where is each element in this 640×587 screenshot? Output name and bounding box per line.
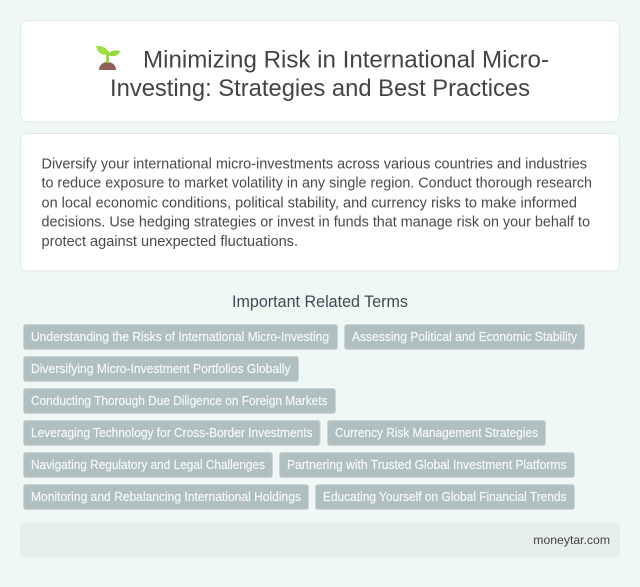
text block: description <box>42 156 592 250</box>
tag: understanding the risks <box>24 324 338 350</box>
text block: description: on local economic conditions, political stability, and currency risks to make informed <box>42 195 577 211</box>
text block: description: Diversify your international micro-investments across various countries and industries <box>42 156 587 172</box>
tag: trusted platforms <box>280 452 574 478</box>
icon: seedling <box>96 46 120 70</box>
tag: currency risk <box>328 420 546 446</box>
tag: due diligence <box>24 388 336 414</box>
tag: regulatory challenges: Navigating Regulatory and Legal Challenges <box>31 458 265 472</box>
tag: understanding the risks: Understanding the Risks of International Micro-Investing <box>31 330 329 344</box>
tag: diversifying portfolios <box>24 356 298 382</box>
tag: monitoring holdings <box>24 484 308 510</box>
text block: description: decisions. Use hedging strategies or invest in funds that manage risk on your behalf to <box>42 214 590 230</box>
tag: leveraging technology: Leveraging Technology for Cross-Border Investments <box>31 426 312 440</box>
tag: diversifying portfolios: Diversifying Micro-Investment Portfolios Globally <box>31 362 291 376</box>
footer <box>20 523 620 557</box>
text block: description: protect against unexpected fluctuations. <box>42 234 298 250</box>
tag: currency risk: Currency Risk Management Strategies <box>335 426 538 440</box>
text block: description: to reduce exposure to market volatility in any single region. Conduct thorough research <box>42 176 592 192</box>
panel: header <box>20 20 620 122</box>
tag: assessing stability: Assessing Political and Economic Stability <box>352 330 578 344</box>
title: Minimizing Risk in International Micro- <box>143 46 549 74</box>
tag: monitoring holdings: Monitoring and Rebalancing International Holdings <box>31 490 301 504</box>
heading: important related terms: Important Related Terms <box>232 293 408 311</box>
tag list <box>24 324 584 510</box>
tag: global trends <box>316 484 574 510</box>
panel: description <box>20 134 620 271</box>
tag: regulatory challenges <box>24 452 272 478</box>
tag: due diligence: Conducting Thorough Due Diligence on Foreign Markets <box>31 394 328 408</box>
tag: global trends: Educating Yourself on Global Financial Trends <box>323 490 566 504</box>
tag: trusted platforms: Partnering with Trusted Global Investment Platforms <box>287 458 566 472</box>
tag: assessing stability <box>344 324 584 350</box>
title: Investing: Strategies and Best Practices <box>110 75 530 102</box>
tag: leveraging technology <box>24 420 320 446</box>
title <box>110 46 549 102</box>
footer source text: moneytar.com <box>533 533 610 547</box>
